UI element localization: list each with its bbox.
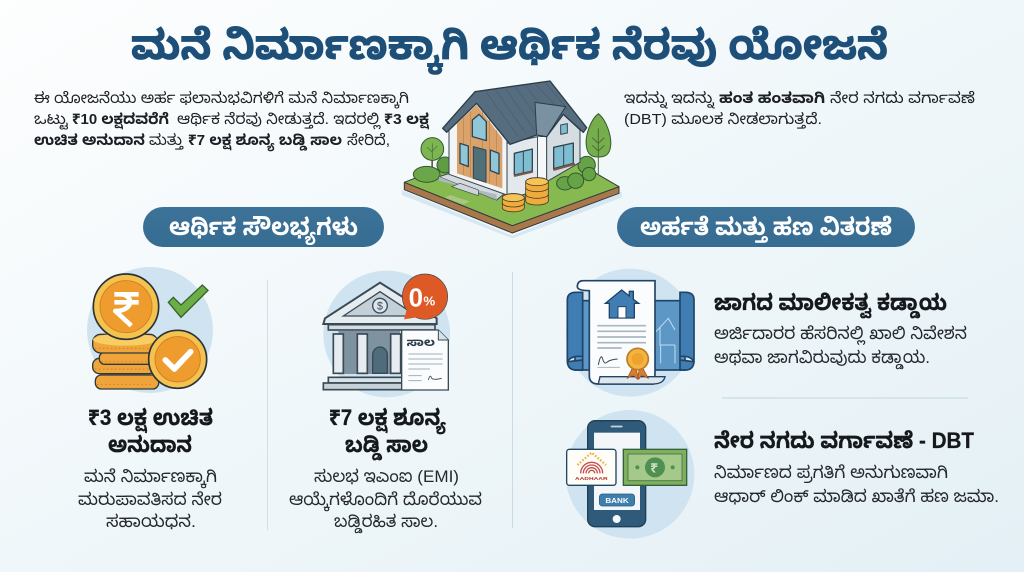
panel: free grant: ಅನುದಾನ: [108, 432, 192, 457]
eligibility heading: ಜಾಗದ ಮಾಲೀಕತ್ವ ಕಡ್ಡಾಯ: [714, 290, 947, 319]
grey walls: [507, 137, 538, 200]
benefit description: ಮರುಪಾವತಿಸದ ನೇರ: [78, 490, 222, 509]
icon: phone with aadhaar card and banknote: AADHAAR: [575, 476, 608, 482]
intro text left: ಸೇರಿದೆ,: [347, 132, 390, 149]
benefit description: ಸಹಾಯಧನ.: [106, 512, 196, 531]
icon: phone with aadhaar card and banknote: BANK: [605, 496, 629, 505]
eligibility description: [714, 463, 999, 506]
icon: bank with zero percent badge and loan paper: 0: [409, 283, 423, 313]
icon: phone with aadhaar card and banknote: [566, 410, 694, 539]
eligibility description: [714, 324, 967, 370]
intro text left: ₹7 ಲಕ್ಷ ಶೂನ್ಯ ಬಡ್ಡಿ ಸಾಲ: [188, 132, 342, 152]
panel: zero interest loan: ಬಡ್ಡಿ ಸಾಲ: [345, 432, 428, 461]
icon: bank with zero percent badge and loan paper: [323, 271, 450, 397]
benefit description: [78, 467, 222, 531]
heading pill: eligibility and disbursement: [617, 207, 915, 247]
wooden gable wall: [449, 103, 507, 195]
icon: bank with zero percent badge and loan paper: $: [377, 301, 383, 313]
heading pill: financial benefits: [143, 207, 384, 247]
heading pill: eligibility and disbursement: ಅರ್ಹತೆ ಮತ್ತು ಹಣ ವಿತರಣೆ: [640, 214, 892, 243]
eligibility description: ಅರ್ಜಿದಾರರ ಹೆಸರಿನಲ್ಲಿ ಖಾಲಿ ನಿವೇಶನ: [714, 324, 967, 346]
intro text left: ಒಟ್ಟು: [34, 111, 69, 130]
icon: deed over blueprint: [566, 269, 694, 397]
benefit description: ಸುಲಭ ಇಎಂಐ (EMI): [314, 467, 459, 486]
intro text left: ₹3 ಲಕ್ಷ: [384, 111, 429, 130]
shrubs right: [578, 156, 596, 181]
benefit description: ಮನೆ ನಿರ್ಮಾಣಕ್ಕಾಗಿ: [84, 467, 217, 489]
intro text right: ನೇರ ನಗದು ವರ್ಗಾವಣೆ: [830, 90, 975, 107]
panel: zero interest loan: [289, 271, 482, 534]
coins: [502, 178, 548, 212]
shrubs front: [557, 173, 584, 190]
benefit heading: ₹7 ಲಕ್ಷ ಶೂನ್ಯ: [329, 405, 447, 435]
panel: land ownership: [566, 269, 967, 397]
benefit description: ಆಯ್ಕೆಗಳೊಂದಿಗೆ ದೊರೆಯುವ: [289, 490, 482, 512]
small tree left: [413, 138, 453, 182]
intro text left: ಮತ್ತು: [149, 132, 184, 150]
tall tree right: [586, 114, 611, 175]
benefit description: ಬಡ್ಡಿರಹಿತ ಸಾಲ.: [334, 512, 438, 534]
icon: phone with aadhaar card and banknote: ₹: [650, 460, 658, 475]
porch: [439, 173, 507, 200]
panel: direct benefit transfer: [566, 410, 999, 539]
intro text left: ಆರ್ಥಿಕ ನೆರವು ನೀಡುತ್ತದೆ. ಇದರಲ್ಲಿ: [177, 111, 381, 130]
intro text left: ₹10 ಲಕ್ಷದವರೆಗೆ: [72, 111, 169, 130]
eligibility description: ಅಥವಾ ಜಾಗವಿರುವುದು ಕಡ್ಡಾಯ.: [714, 348, 930, 370]
title: ಮನೆ ನಿರ್ಮಾಣಕ್ಕಾಗಿ ಆರ್ಥಿಕ ನೆರವು ಯೋಜನೆ: [131, 22, 888, 75]
icon: bank with zero percent badge and loan paper: ಸಾಲ: [407, 337, 435, 349]
intro text left: [34, 90, 429, 152]
panel: free grant: [78, 267, 222, 531]
icon: bank with zero percent badge and loan paper: %: [423, 293, 435, 308]
heading pill: financial benefits: ಆರ್ಥಿಕ ಸೌಲಭ್ಯಗಳು: [169, 214, 358, 246]
illustration: house on lawn with coins: [402, 81, 622, 238]
intro text right: [624, 90, 975, 129]
intro text left: ಈ ಯೋಜನೆಯು ಅರ್ಹ ಫಲಾನುಭವಿಗಳಿಗೆ ಮನೆ ನಿರ್ಮಾಣಕ್ಕಾಗಿ: [34, 90, 409, 109]
intro text right: (DBT) ಮೂಲಕ ನೀಡಲಾಗುತ್ತದೆ.: [624, 111, 822, 129]
icon: rupee coins with check: [87, 267, 213, 393]
benefit heading: ₹3 ಲಕ್ಷ ಉಚಿತ: [88, 405, 213, 434]
eligibility description: ನಿರ್ಮಾಣದ ಪ್ರಗತಿಗೆ ಅನುಗುಣವಾಗಿ: [714, 463, 948, 484]
eligibility description: ಆಧಾರ್ ಲಿಂಕ್ ಮಾಡಿದ ಖಾತೆಗೆ ಹಣ ಜಮಾ.: [714, 487, 999, 506]
roof: [443, 81, 587, 144]
intro text left: ಉಚಿತ ಅನುದಾನ: [34, 132, 145, 149]
intro text right: ಹಂತ ಹಂತವಾಗಿ: [719, 90, 825, 107]
eligibility heading: ನೇರ ನಗದು ವರ್ಗಾವಣೆ - DBT: [714, 428, 975, 453]
benefit description: [289, 467, 482, 534]
intro text right: ಇದನ್ನು ಇದನ್ನು: [624, 90, 716, 109]
